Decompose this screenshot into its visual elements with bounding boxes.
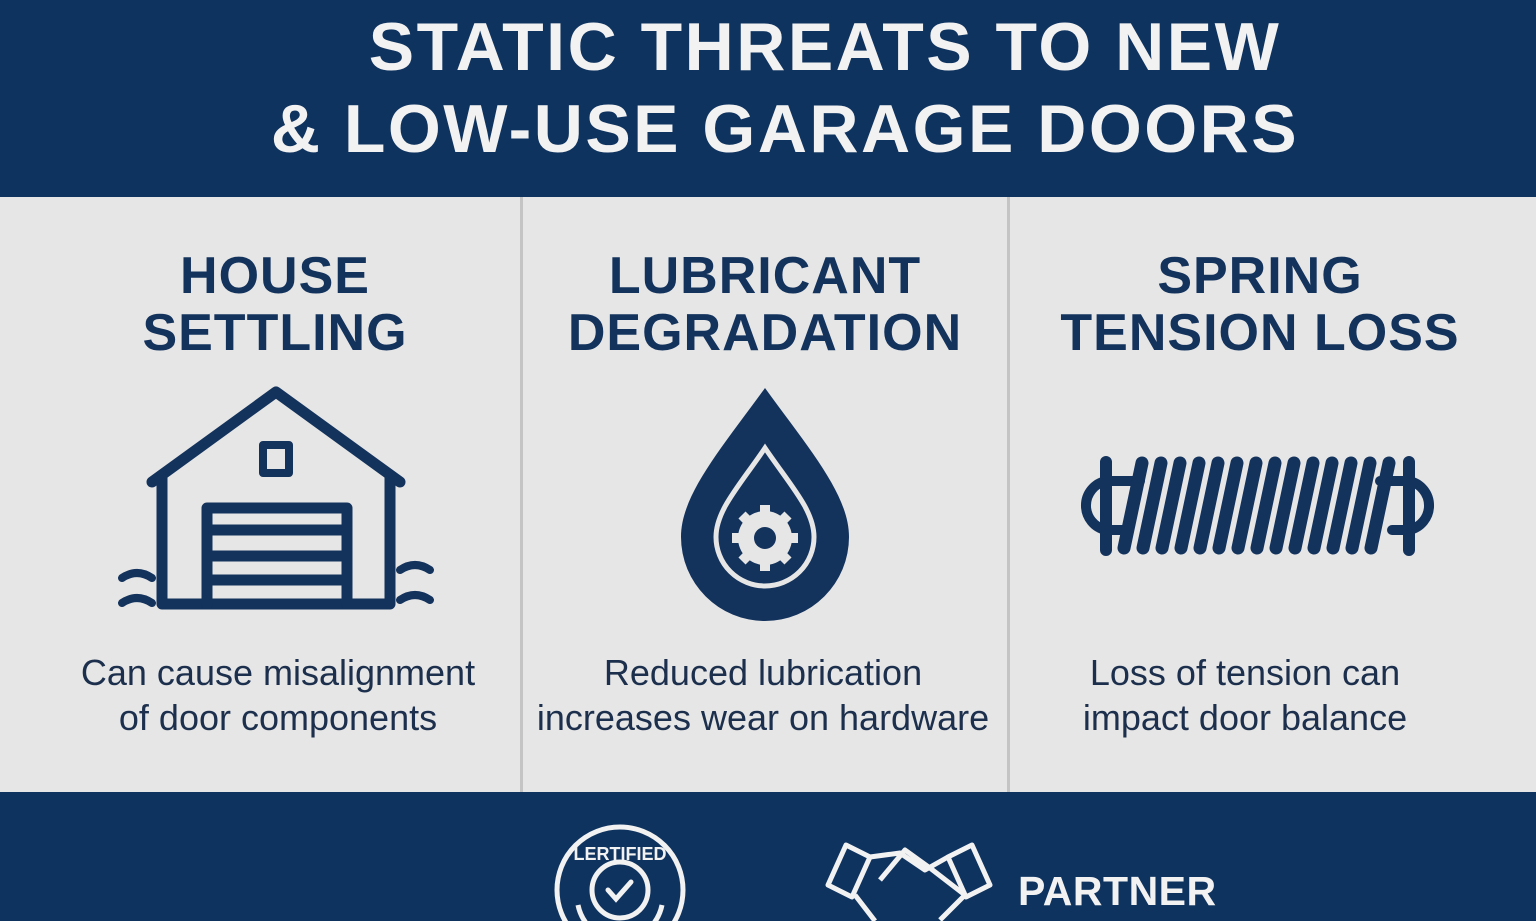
icon: handshake — [826, 842, 992, 921]
text: spring — [1083, 652, 1407, 738]
icon: house — [118, 386, 434, 610]
heading: spring: TENSION LOSS — [1060, 304, 1460, 362]
footer — [0, 792, 1536, 921]
text: spring: Loss of tension can — [1090, 652, 1400, 693]
title line 2: & LOW-USE GARAGE DOORS — [271, 91, 1299, 167]
text: lubricant: increases wear on hardware — [537, 697, 989, 738]
text: spring: impact door balance — [1083, 697, 1407, 738]
text: house: of door components — [119, 697, 437, 738]
heading: spring — [1060, 247, 1460, 362]
text: partner: PARTNER — [1018, 868, 1217, 914]
text: lubricant — [537, 652, 989, 738]
title line 1: STATIC THREATS TO NEW — [369, 9, 1281, 85]
text: house — [81, 652, 475, 738]
heading: house settling — [142, 247, 408, 362]
text: house: Can cause misalignment — [81, 652, 475, 693]
heading: house settling: SETTLING — [142, 304, 408, 362]
icon: certified badge: LERTIFIED — [574, 844, 666, 864]
icon: certified badge — [554, 824, 686, 921]
heading: lubricant: LUBRICANT — [609, 247, 921, 305]
heading: lubricant: DEGRADATION — [568, 304, 962, 362]
heading: house settling: HOUSE — [180, 247, 370, 305]
text: lubricant: Reduced lubrication — [604, 652, 922, 693]
header — [0, 0, 1536, 197]
icon: oil drop — [681, 388, 849, 621]
heading: lubricant — [568, 247, 962, 362]
icon: spring — [1080, 456, 1434, 556]
heading: spring: SPRING — [1157, 247, 1363, 305]
